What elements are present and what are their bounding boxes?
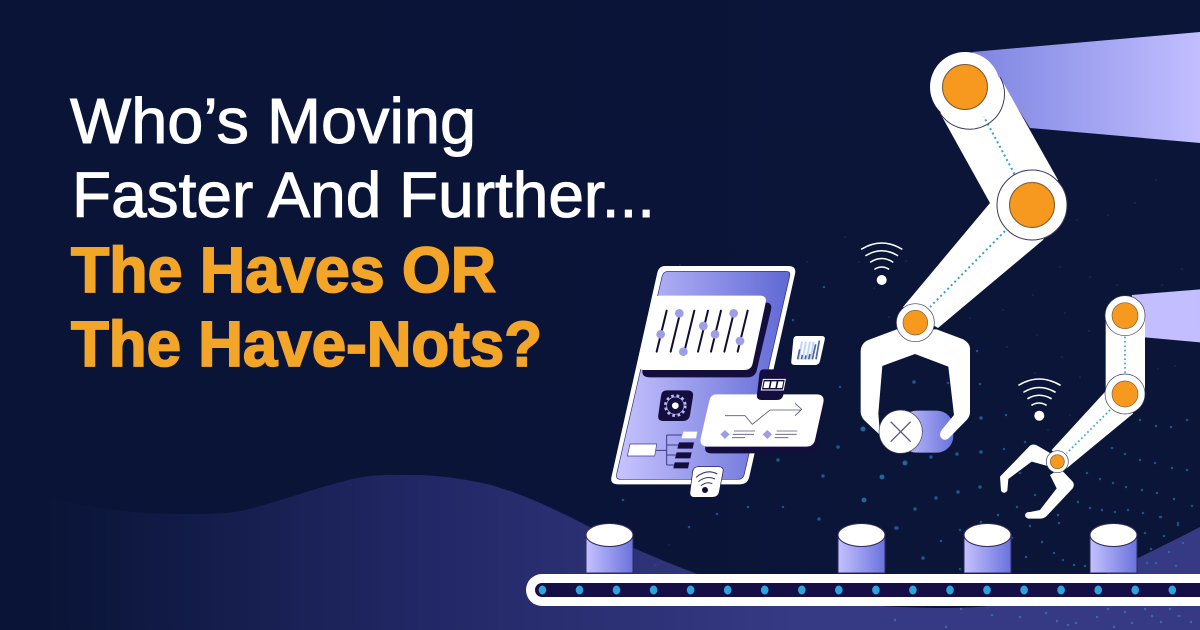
elbow joint	[997, 170, 1067, 240]
conveyor items	[586, 524, 1137, 573]
shoulder joint	[930, 52, 1004, 129]
small shoulder joint	[1105, 296, 1145, 336]
cylinder end cap	[879, 410, 922, 453]
gripper joint	[896, 304, 934, 342]
upper arm segment	[940, 77, 1058, 205]
heading line: Who's Moving: Who’s Moving	[70, 85, 476, 157]
small wrist joint	[1046, 451, 1068, 473]
held cylinder	[900, 411, 953, 453]
title	[70, 85, 655, 380]
cylinder 4	[1090, 524, 1137, 573]
tablet body	[611, 266, 795, 484]
conveyor belt	[526, 574, 1200, 606]
heading line: The Haves OR: The Haves OR	[71, 234, 496, 306]
large gripper with held cylinder	[861, 304, 970, 453]
tablet illustration	[611, 266, 825, 497]
large robot arm	[903, 32, 1200, 328]
gripper claw	[861, 329, 970, 440]
particle field	[623, 180, 1192, 627]
icon: battery	[757, 369, 788, 400]
icon: wifi signal upper	[862, 243, 902, 285]
small arm light beam	[1132, 289, 1200, 342]
slider panel	[638, 296, 771, 377]
chart panel	[700, 394, 824, 453]
small arm lower segment	[1052, 390, 1133, 468]
cylinder 1	[586, 524, 633, 573]
icon: wifi signal lower	[1019, 379, 1060, 421]
arm base light beam	[972, 32, 1200, 143]
heading line: The Have-Nots: The Have-Nots?	[71, 308, 542, 380]
icon: gear	[658, 390, 693, 421]
icon: bar chart	[791, 336, 825, 365]
small gripper claw left	[1000, 444, 1052, 493]
small gripper claw right	[1025, 468, 1074, 519]
small robot arm	[1000, 289, 1200, 519]
small arm upper segment	[1106, 316, 1145, 394]
heading line: Faster And Further: Faster And Further...	[72, 159, 655, 231]
cylinder 3	[964, 524, 1011, 573]
lower arm segment	[903, 170, 1066, 328]
cylinder 2	[838, 524, 885, 573]
small elbow joint	[1105, 374, 1145, 414]
icon: wifi card	[690, 467, 723, 497]
background wave	[50, 475, 1200, 630]
flow diagram	[627, 432, 697, 468]
